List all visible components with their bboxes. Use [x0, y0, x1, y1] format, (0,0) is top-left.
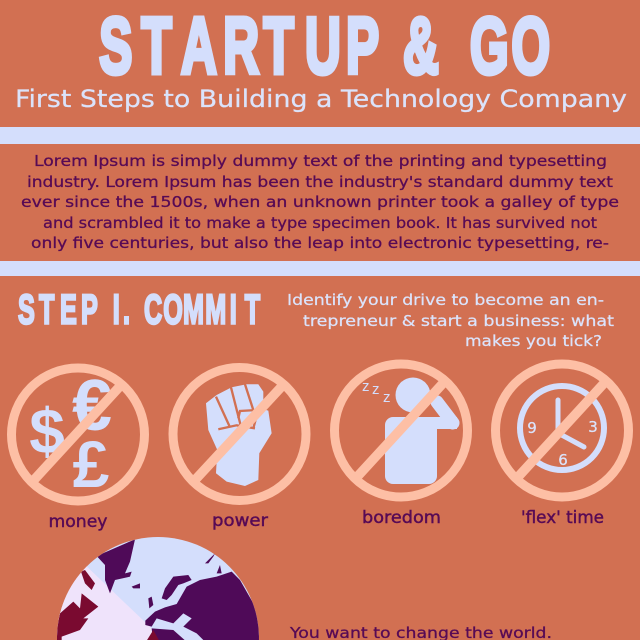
icon: fist	[173, 368, 306, 500]
label: flex time: 'flex' time	[521, 508, 604, 528]
intro text block: only five centuries, but also the leap into electronic typesetting, re-	[31, 234, 609, 252]
label: money: money	[48, 512, 108, 532]
step heading: STEPI.COMMIT	[18, 287, 260, 333]
step description: trepreneur & start a business: what	[303, 312, 614, 330]
icon: sleeping person	[334, 364, 468, 497]
icon: sleeping person: z	[362, 378, 370, 395]
icon: sleeping person: z	[383, 389, 390, 406]
intro text block: and scrambled it to make a type specimen book. It has survived not	[43, 214, 597, 232]
intro text block: Lorem Ipsum is simply dummy text of the printing and typesetting	[34, 152, 607, 170]
label: power: power	[212, 511, 268, 531]
subtitle: First Steps to Building a Technology Company	[15, 85, 627, 113]
step description: makes you tick?	[465, 332, 602, 350]
icon: money: $	[29, 395, 65, 467]
icon: money	[12, 366, 144, 501]
icon: money: €	[72, 366, 112, 446]
top band	[0, 127, 640, 144]
icon: money: £	[73, 427, 110, 501]
icon: clock: 6	[558, 451, 568, 469]
step description: Identify your drive to become an en-	[287, 291, 604, 309]
step description	[287, 291, 614, 350]
intro text block: industry. Lorem Ipsum has been the industry's standard dummy text	[27, 173, 613, 191]
icon: sleeping person: z	[372, 381, 380, 398]
lower band	[0, 261, 640, 276]
label: boredom: boredom	[362, 508, 441, 528]
title: STARTUP&GO	[99, 2, 550, 91]
intro text block	[21, 152, 619, 252]
intro text block: ever since the 1500s, when an unknown printer took a galley of type	[21, 193, 619, 211]
icon: clock: 9	[527, 419, 537, 437]
icon: clock: 3	[588, 418, 598, 436]
icon: clock	[496, 364, 628, 497]
globe	[57, 537, 259, 640]
